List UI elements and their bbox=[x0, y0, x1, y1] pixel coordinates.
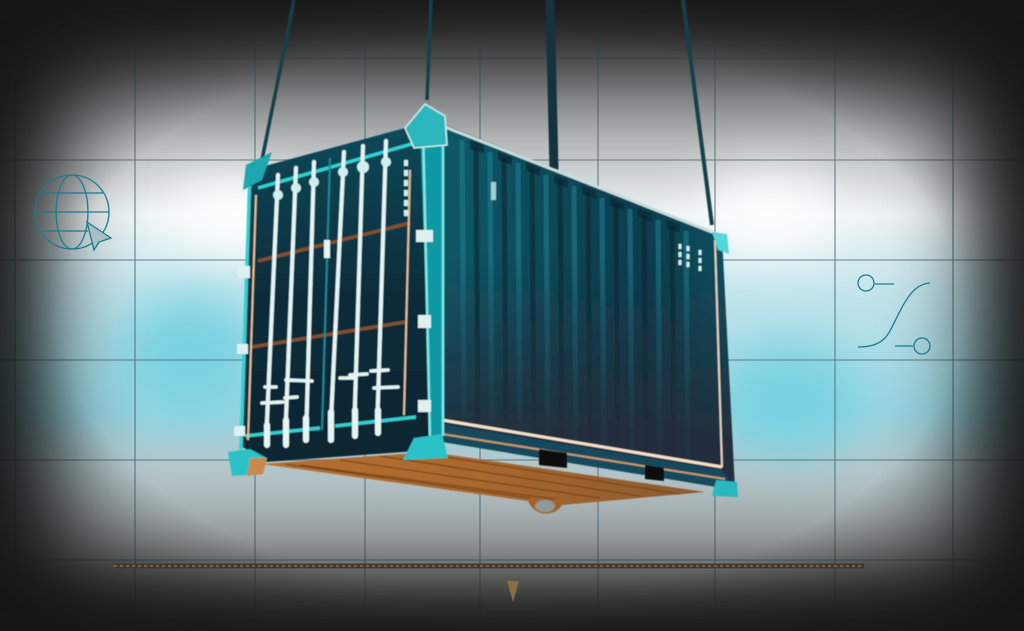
locking rods bbox=[266, 141, 386, 443]
door markings bbox=[404, 160, 408, 220]
door rails bbox=[241, 143, 416, 450]
container floor bbox=[262, 452, 705, 514]
icon: curve with two nodes bbox=[858, 275, 930, 354]
glowing top rail bbox=[440, 125, 722, 236]
corner post bbox=[228, 104, 738, 497]
side markings bbox=[680, 244, 700, 272]
rod caps bbox=[273, 157, 391, 258]
top corrugation shadows bbox=[470, 140, 680, 233]
ground rail bbox=[114, 564, 864, 568]
marker pin bbox=[507, 581, 519, 602]
lower band bbox=[442, 424, 735, 490]
container door face bbox=[240, 125, 430, 462]
rod handles bbox=[262, 370, 398, 445]
container side wall bbox=[438, 122, 735, 490]
hoist cables bbox=[262, 0, 712, 225]
container bbox=[228, 104, 738, 514]
wooden cross bars bbox=[252, 223, 410, 347]
glowing lower rail bbox=[442, 420, 722, 467]
icon: globe with cursor bbox=[35, 175, 111, 250]
forklift pockets bbox=[539, 449, 567, 468]
